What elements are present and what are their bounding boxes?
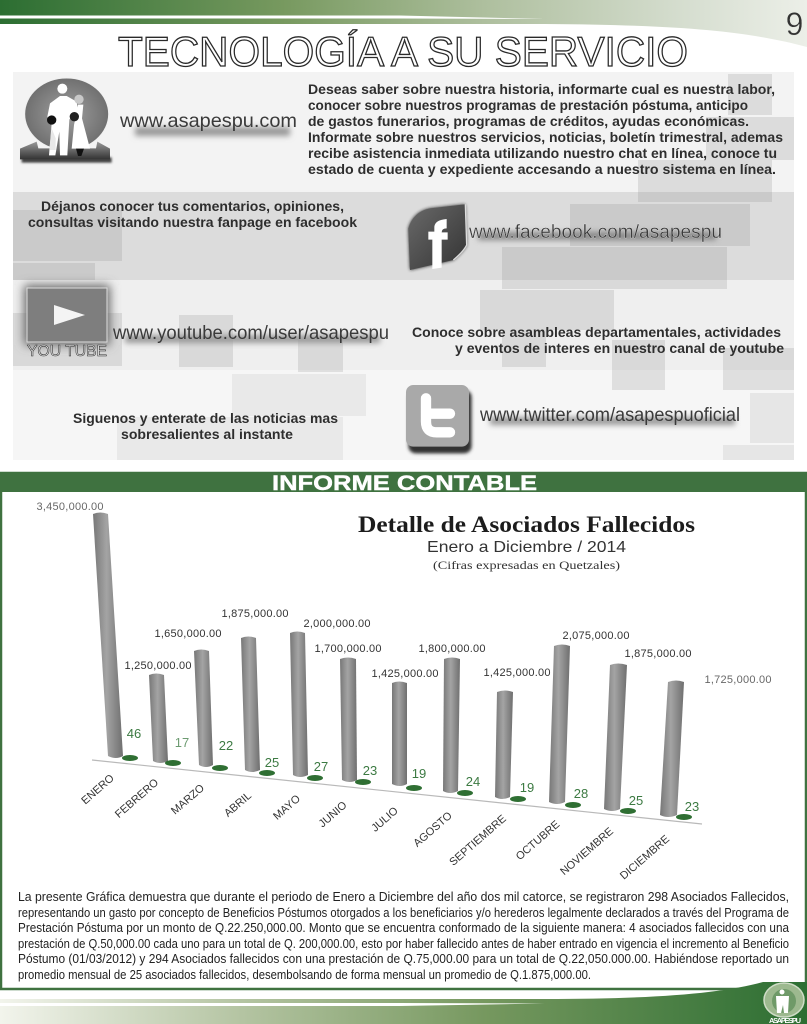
text block: twitter invitation [73, 411, 338, 442]
month labels: SEPTIEMBRE [447, 813, 509, 869]
amount labels [36, 501, 772, 686]
month labels: ABRIL [222, 790, 254, 820]
amount labels: 1,725,000.00 [704, 674, 772, 686]
green count markers [122, 755, 692, 820]
text block: website description: Deseas saber sobre nuestra historia, informarte cual es nuestra labor, [308, 82, 775, 97]
facebook url: www.facebook.com/asapespu [468, 221, 722, 243]
text block: facebook invitation [28, 199, 358, 230]
month labels: JULIO [369, 805, 401, 834]
icon: footer ASAPESPU logo [764, 983, 804, 1024]
text block: youtube description [412, 325, 785, 356]
amount labels: 1,875,000.00 [624, 648, 692, 660]
count labels: 24 [466, 774, 480, 789]
month labels: OCTUBRE [514, 819, 562, 863]
amount labels: 3,450,000.00 [36, 501, 104, 513]
text block: website description [308, 82, 783, 177]
amount labels: 1,250,000.00 [124, 660, 192, 672]
chart title [358, 512, 695, 572]
count labels: 27 [314, 759, 328, 774]
text block: website description: de gastos funerarios, programas de créditos, ayudas económicas. [308, 114, 749, 129]
text block: website description: recibe asistencia inmediata utilizando nuestro chat en línea, conoce tu [308, 146, 777, 161]
panel: informe contable frame [1, 473, 806, 989]
icon: youtube [24, 285, 110, 345]
text block: website description: conocer sobre nuestros programas de prestación póstuma, anticipo [308, 98, 748, 113]
month labels: AGOSTO [411, 810, 455, 850]
text block: twitter invitation: Siguenos y enterate de las noticias mas [73, 411, 338, 426]
bar chart [36, 501, 772, 882]
count labels: 22 [219, 738, 233, 753]
youtube url: www.youtube.com/user/asapespu [112, 322, 389, 344]
twitter url: www.twitter.com/asapespuoficial [479, 404, 740, 426]
main title: TECNOLOGÍA A SU SERVICIO [118, 28, 688, 75]
text block: website description: estado de cuenta y expediente accesando a nuestro sistema en línea. [308, 162, 776, 177]
chart title: Enero a Diciembre / 2014 [427, 539, 626, 556]
amount labels: 1,875,000.00 [222, 608, 288, 620]
count labels: 23 [685, 799, 699, 814]
amount labels: 1,425,000.00 [372, 668, 438, 680]
amount labels: 1,650,000.00 [154, 628, 222, 640]
chart title: (Cifras expresadas en Quetzales) [433, 558, 620, 572]
count labels: 23 [363, 763, 377, 778]
icon: facebook [408, 204, 467, 270]
month labels: DICIEMBRE [618, 833, 672, 882]
amount labels: 2,000,000.00 [304, 618, 370, 630]
text block: youtube description: y eventos de interes en nuestro canal de youtube [455, 341, 785, 356]
month labels: MARZO [169, 782, 207, 817]
footer banner [0, 982, 807, 1024]
panel: social media channels [13, 72, 794, 460]
text block: chart explanation: promedio mensual de 25 asociados fallecidos, desembolsando de forma mensual un promedio de Q.1.875,000.00. [18, 967, 591, 982]
count labels [127, 726, 699, 814]
heading bar: informe contable [0, 472, 807, 495]
text block: youtube description: Conoce sobre asambleas departamentales, actividades [412, 325, 781, 340]
amount labels: 1,800,000.00 [418, 643, 486, 655]
page number: 9 [786, 6, 803, 42]
website url: www.asapespu.com [119, 110, 297, 132]
heading bar: informe contable: INFORME CONTABLE [272, 472, 537, 495]
chart title: Detalle de Asociados Fallecidos [358, 512, 695, 537]
month labels: MAYO [271, 793, 303, 823]
top header banner [0, 0, 807, 47]
count labels: 28 [574, 786, 588, 801]
month labels [79, 772, 672, 882]
month labels: FEBRERO [113, 776, 161, 821]
text block: website description: Informate sobre nuestros servicios, noticias, boletín trimestral, ademas [308, 130, 783, 145]
text block: chart explanation [18, 889, 790, 982]
count labels: 25 [629, 793, 643, 808]
count labels: 19 [520, 780, 534, 795]
amount labels: 2,075,000.00 [562, 630, 630, 642]
icon: twitter [406, 385, 472, 453]
amount labels: 1,425,000.00 [484, 667, 550, 679]
youtube caption: YOU TUBE [27, 343, 107, 360]
month labels: ENERO [79, 772, 117, 807]
text block: facebook invitation: Déjanos conocer tus comentarios, opiniones, [41, 199, 344, 214]
count labels: 19 [412, 766, 426, 781]
icon: ASAPESPU logo [20, 78, 112, 163]
count labels: 25 [265, 755, 279, 770]
count labels: 46 [127, 726, 141, 741]
amount labels: 1,700,000.00 [314, 643, 382, 655]
cylinder bars [93, 512, 684, 817]
month labels: JUNIO [317, 799, 350, 830]
text block: twitter invitation: sobresalientes al instante [121, 427, 293, 442]
month labels: NOVIEMBRE [558, 826, 616, 878]
count labels: 17 [175, 735, 189, 750]
text block: facebook invitation: consultas visitando nuestra fanpage en facebook [28, 215, 358, 230]
